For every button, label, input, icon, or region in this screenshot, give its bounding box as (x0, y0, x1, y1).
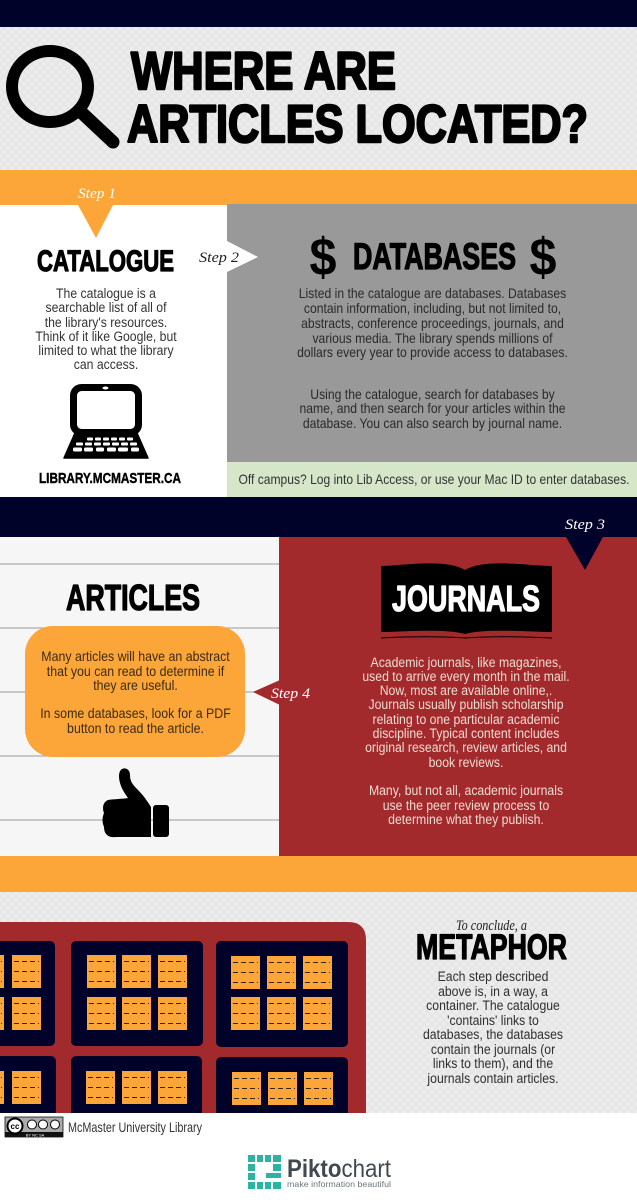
databases text: Using the catalogue, search for databases by (310, 386, 555, 402)
metaphor text: above is, in a way, a (438, 983, 549, 999)
orange band (0, 856, 637, 892)
articles callout: that you can read to determine if (47, 663, 225, 679)
databases heading (310, 228, 556, 287)
catalogue url: LIBRARY.MCMASTER.CA (39, 471, 181, 487)
panel: metaphor (0, 892, 637, 1113)
metaphor text (423, 968, 563, 1086)
off campus note (227, 462, 637, 497)
panel: journals (253, 517, 637, 856)
step 3 marker (565, 517, 605, 570)
icon: laptop (64, 386, 148, 458)
header panel (0, 27, 637, 170)
journals text: Academic journals, like magazines, (371, 654, 561, 670)
catalogue text: searchable list of all of (46, 299, 167, 315)
catalogue text: Think of it like Google, but (35, 328, 177, 344)
footer (0, 1113, 637, 1200)
metaphor diagram: nested containers (0, 922, 366, 1113)
step 3 marker: Step 3 (565, 517, 605, 533)
metaphor text: databases, the databases (423, 1026, 563, 1042)
articles callout: button to read the article. (67, 720, 204, 736)
catalogue heading: CATALOGUE (37, 245, 174, 278)
journals text: use the peer review process to (383, 797, 549, 813)
icon: thumbs up (102, 768, 169, 837)
journals text: relating to one particular academic (373, 711, 560, 727)
databases text: dollars every year to provide access to databases. (297, 344, 568, 360)
journals text: Journals usually publish scholarship (368, 696, 564, 712)
databases heading: DATABASES (353, 236, 516, 277)
journals text: original research, review articles, and (365, 739, 567, 755)
catalogue text: The catalogue is a (56, 285, 157, 301)
top navy band (0, 0, 637, 27)
step 4 marker: Step 4 (271, 686, 311, 702)
attribution: McMaster University Library (68, 1120, 202, 1135)
metaphor text: 'contains' links to (447, 1012, 539, 1028)
databases text: contain information, including, but not limited to, (304, 300, 561, 316)
navy band (0, 497, 637, 537)
databases heading: $ (530, 228, 556, 287)
orange band (0, 170, 637, 205)
articles callout: In some databases, look for a PDF (40, 705, 231, 721)
journals text: determine what they publish. (388, 811, 544, 827)
databases text: name, and then search for your articles within the (299, 400, 566, 416)
icon: creative commons badge (5, 1117, 63, 1138)
metaphor text: contain the journals (or (431, 1041, 556, 1057)
step 2 marker: Step 2 (199, 250, 240, 266)
journals text (362, 654, 570, 827)
journals text: Now, most are available online,. (380, 682, 552, 698)
title (127, 42, 588, 154)
metaphor heading: To conclude, a (456, 918, 527, 934)
articles callout: Many articles will have an abstract (41, 648, 230, 664)
icon: magnifying glass (12, 51, 113, 142)
step 4 marker (253, 680, 311, 705)
metaphor text: journals contain articles. (426, 1070, 559, 1086)
panel: catalogue (0, 186, 227, 497)
databases text: database. You can also search by journal name. (303, 415, 562, 431)
step 1 marker: Step 1 (78, 186, 116, 202)
panel: articles (0, 537, 279, 856)
databases text: various media. The library spends millions of (312, 330, 553, 346)
catalogue text (35, 285, 177, 372)
piktochart logo (248, 1155, 391, 1189)
step 2 marker (199, 241, 258, 272)
title: WHERE ARE (131, 42, 396, 101)
catalogue text: can access. (74, 356, 138, 372)
databases text: Listed in the catalogue are databases. Databases (299, 285, 566, 301)
metaphor text: Each step described (438, 968, 548, 984)
icon: creative commons badge: BY NC SA (26, 1132, 45, 1138)
journals book heading: JOURNALS (392, 578, 540, 619)
journals text: used to arrive every month in the mail. (362, 668, 570, 684)
databases text: abstracts, conference proceedings, journals, and (301, 315, 564, 331)
metaphor heading (416, 918, 567, 967)
metaphor text: container. The catalogue (426, 997, 560, 1013)
catalogue text: limited to what the library (38, 342, 174, 358)
icon: creative commons badge: cc (11, 1122, 20, 1131)
metaphor text: links to them), and the (433, 1055, 553, 1071)
journals book heading (381, 563, 552, 638)
panel: databases (199, 204, 637, 462)
piktochart logo: Piktochart (287, 1155, 391, 1183)
articles callout (25, 626, 245, 757)
step 1 marker (78, 186, 116, 238)
articles callout: they are useful. (93, 677, 178, 693)
journals text: discipline. Typical content includes (373, 725, 559, 741)
articles heading: ARTICLES (66, 577, 200, 618)
metaphor heading: METAPHOR (416, 928, 567, 967)
catalogue text: the library's resources. (45, 314, 167, 330)
databases heading: $ (310, 228, 336, 287)
piktochart logo: make information beautiful (287, 1179, 391, 1189)
journals text: Many, but not all, academic journals (369, 782, 563, 798)
databases text (297, 285, 568, 431)
journals text: book reviews. (429, 754, 503, 770)
